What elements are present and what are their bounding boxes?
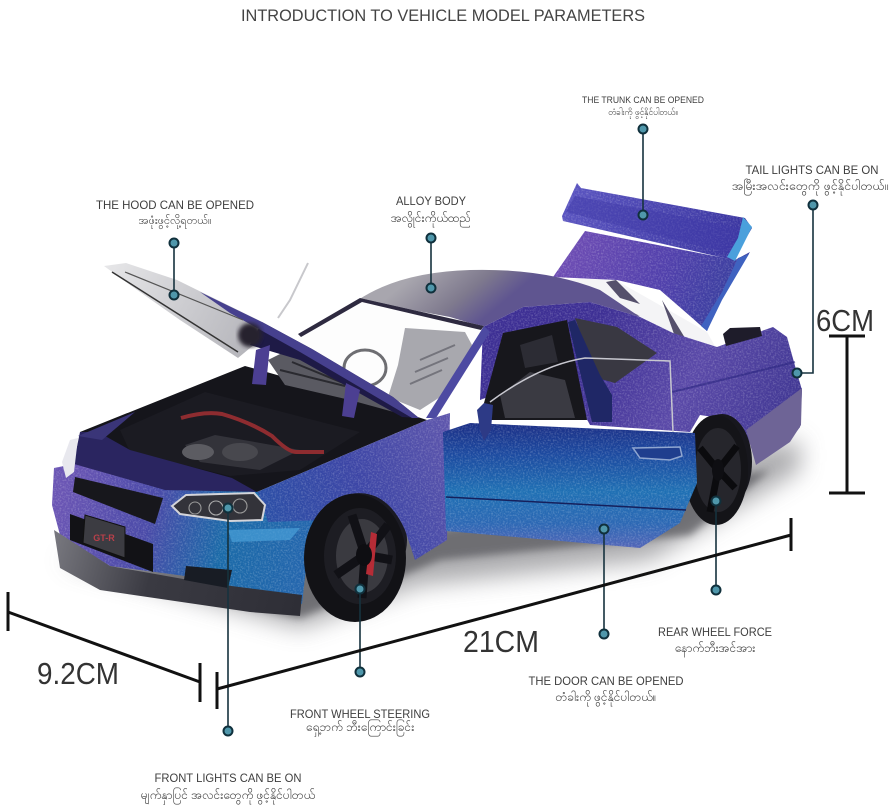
rear wing xyxy=(562,183,752,261)
rear bumper xyxy=(746,388,802,465)
wing end plate xyxy=(727,217,752,261)
cabin and rear body xyxy=(480,302,802,460)
label: front wheel: FRONT WHEEL STEERING xyxy=(290,707,430,721)
label: front wheel: ရှေ့ဘက် ဘီးကြောင်းခြင်း xyxy=(306,718,414,737)
roof xyxy=(358,270,640,327)
red strut bar xyxy=(181,413,324,452)
door handle xyxy=(633,447,682,460)
rear wheel xyxy=(684,414,752,525)
front wheel arch xyxy=(303,490,407,590)
dimension: height 6CM xyxy=(816,303,874,493)
label: front lights xyxy=(141,771,315,805)
steering wheel xyxy=(344,350,386,386)
dimension: height 6CM: 6CM xyxy=(816,303,874,338)
engine bay xyxy=(73,345,427,492)
rear deck vent xyxy=(723,327,762,346)
license plate xyxy=(83,515,125,558)
label: door xyxy=(528,674,684,707)
label: trunk: THE TRUNK CAN BE OPENED xyxy=(582,95,704,106)
dimension: length 21CM: 21CM xyxy=(463,624,539,659)
label: rear wheel: နောက်ဘီးအင်အား xyxy=(675,640,755,658)
label: trunk xyxy=(582,95,704,119)
label: alloy body xyxy=(391,194,471,228)
ground shadow xyxy=(60,440,800,628)
car illustration xyxy=(52,183,802,628)
front cowl panel xyxy=(73,432,257,492)
label: tail lights: TAIL LIGHTS CAN BE ON xyxy=(746,163,878,177)
trunk opening interior xyxy=(556,278,716,348)
lower intake xyxy=(184,566,232,588)
lower front lip xyxy=(54,530,302,616)
label: hood: THE HOOD CAN BE OPENED xyxy=(96,198,254,212)
front fender xyxy=(257,413,450,565)
front bumper xyxy=(52,464,325,604)
title: INTRODUCTION TO VEHICLE MODEL PARAMETERS xyxy=(241,7,645,25)
open door xyxy=(443,358,697,548)
front seat xyxy=(388,328,472,410)
windshield xyxy=(298,298,490,418)
label: front lights: မျက်နှာပြင် အလင်းတွေကို ဖွင့်နိုင်ပါတယ် xyxy=(141,786,315,805)
rear crease xyxy=(672,362,795,392)
label: rear wheel: REAR WHEEL FORCE xyxy=(658,625,772,639)
label: rear wheel xyxy=(658,625,772,658)
trunk lid lit edge xyxy=(701,254,749,331)
label: door: တံခါးကို ဖွင့်နိုင်ပါတယ်။ xyxy=(556,689,656,707)
label: hood: အဖုံးဖွင့်လို့ရတယ်။ xyxy=(139,214,211,229)
label: front wheel xyxy=(290,707,430,737)
callout lines and dots xyxy=(170,124,818,736)
label: hood xyxy=(96,198,254,229)
lower grille xyxy=(70,514,153,572)
side mirror xyxy=(477,403,493,441)
open hood xyxy=(104,263,419,418)
left headlamp xyxy=(62,438,78,478)
upper grille xyxy=(73,477,163,524)
license plate: GT-R xyxy=(93,533,115,543)
label: tail lights: အမြီးအလင်းတွေကို ဖွင့်နိုင်ပါတယ်။ xyxy=(732,178,889,196)
dimension: width 9.2CM: 9.2CM xyxy=(37,656,119,691)
right headlight xyxy=(172,493,265,521)
wiper antenna xyxy=(278,263,308,318)
front wheel xyxy=(304,494,406,622)
dash panel below windshield xyxy=(268,345,412,417)
dimension: width 9.2CM xyxy=(8,592,200,702)
open trunk lid xyxy=(553,231,750,331)
door window frame xyxy=(490,358,673,432)
side window and interior xyxy=(484,320,612,422)
rear quarter window xyxy=(575,318,657,383)
label: trunk: တံခါးကို ဖွင့်နိုင်ပါတယ်။ xyxy=(608,107,678,119)
dimension: length 21CM xyxy=(217,518,791,709)
label: door: THE DOOR CAN BE OPENED xyxy=(528,674,684,688)
label: alloy body: အလွိုင်းကိုယ်ထည် xyxy=(391,210,471,228)
label: alloy body: ALLOY BODY xyxy=(396,194,466,208)
label: front lights: FRONT LIGHTS CAN BE ON xyxy=(154,771,302,785)
bumper highlight xyxy=(228,528,300,542)
label: tail lights xyxy=(732,163,889,196)
hood struts xyxy=(252,345,360,418)
